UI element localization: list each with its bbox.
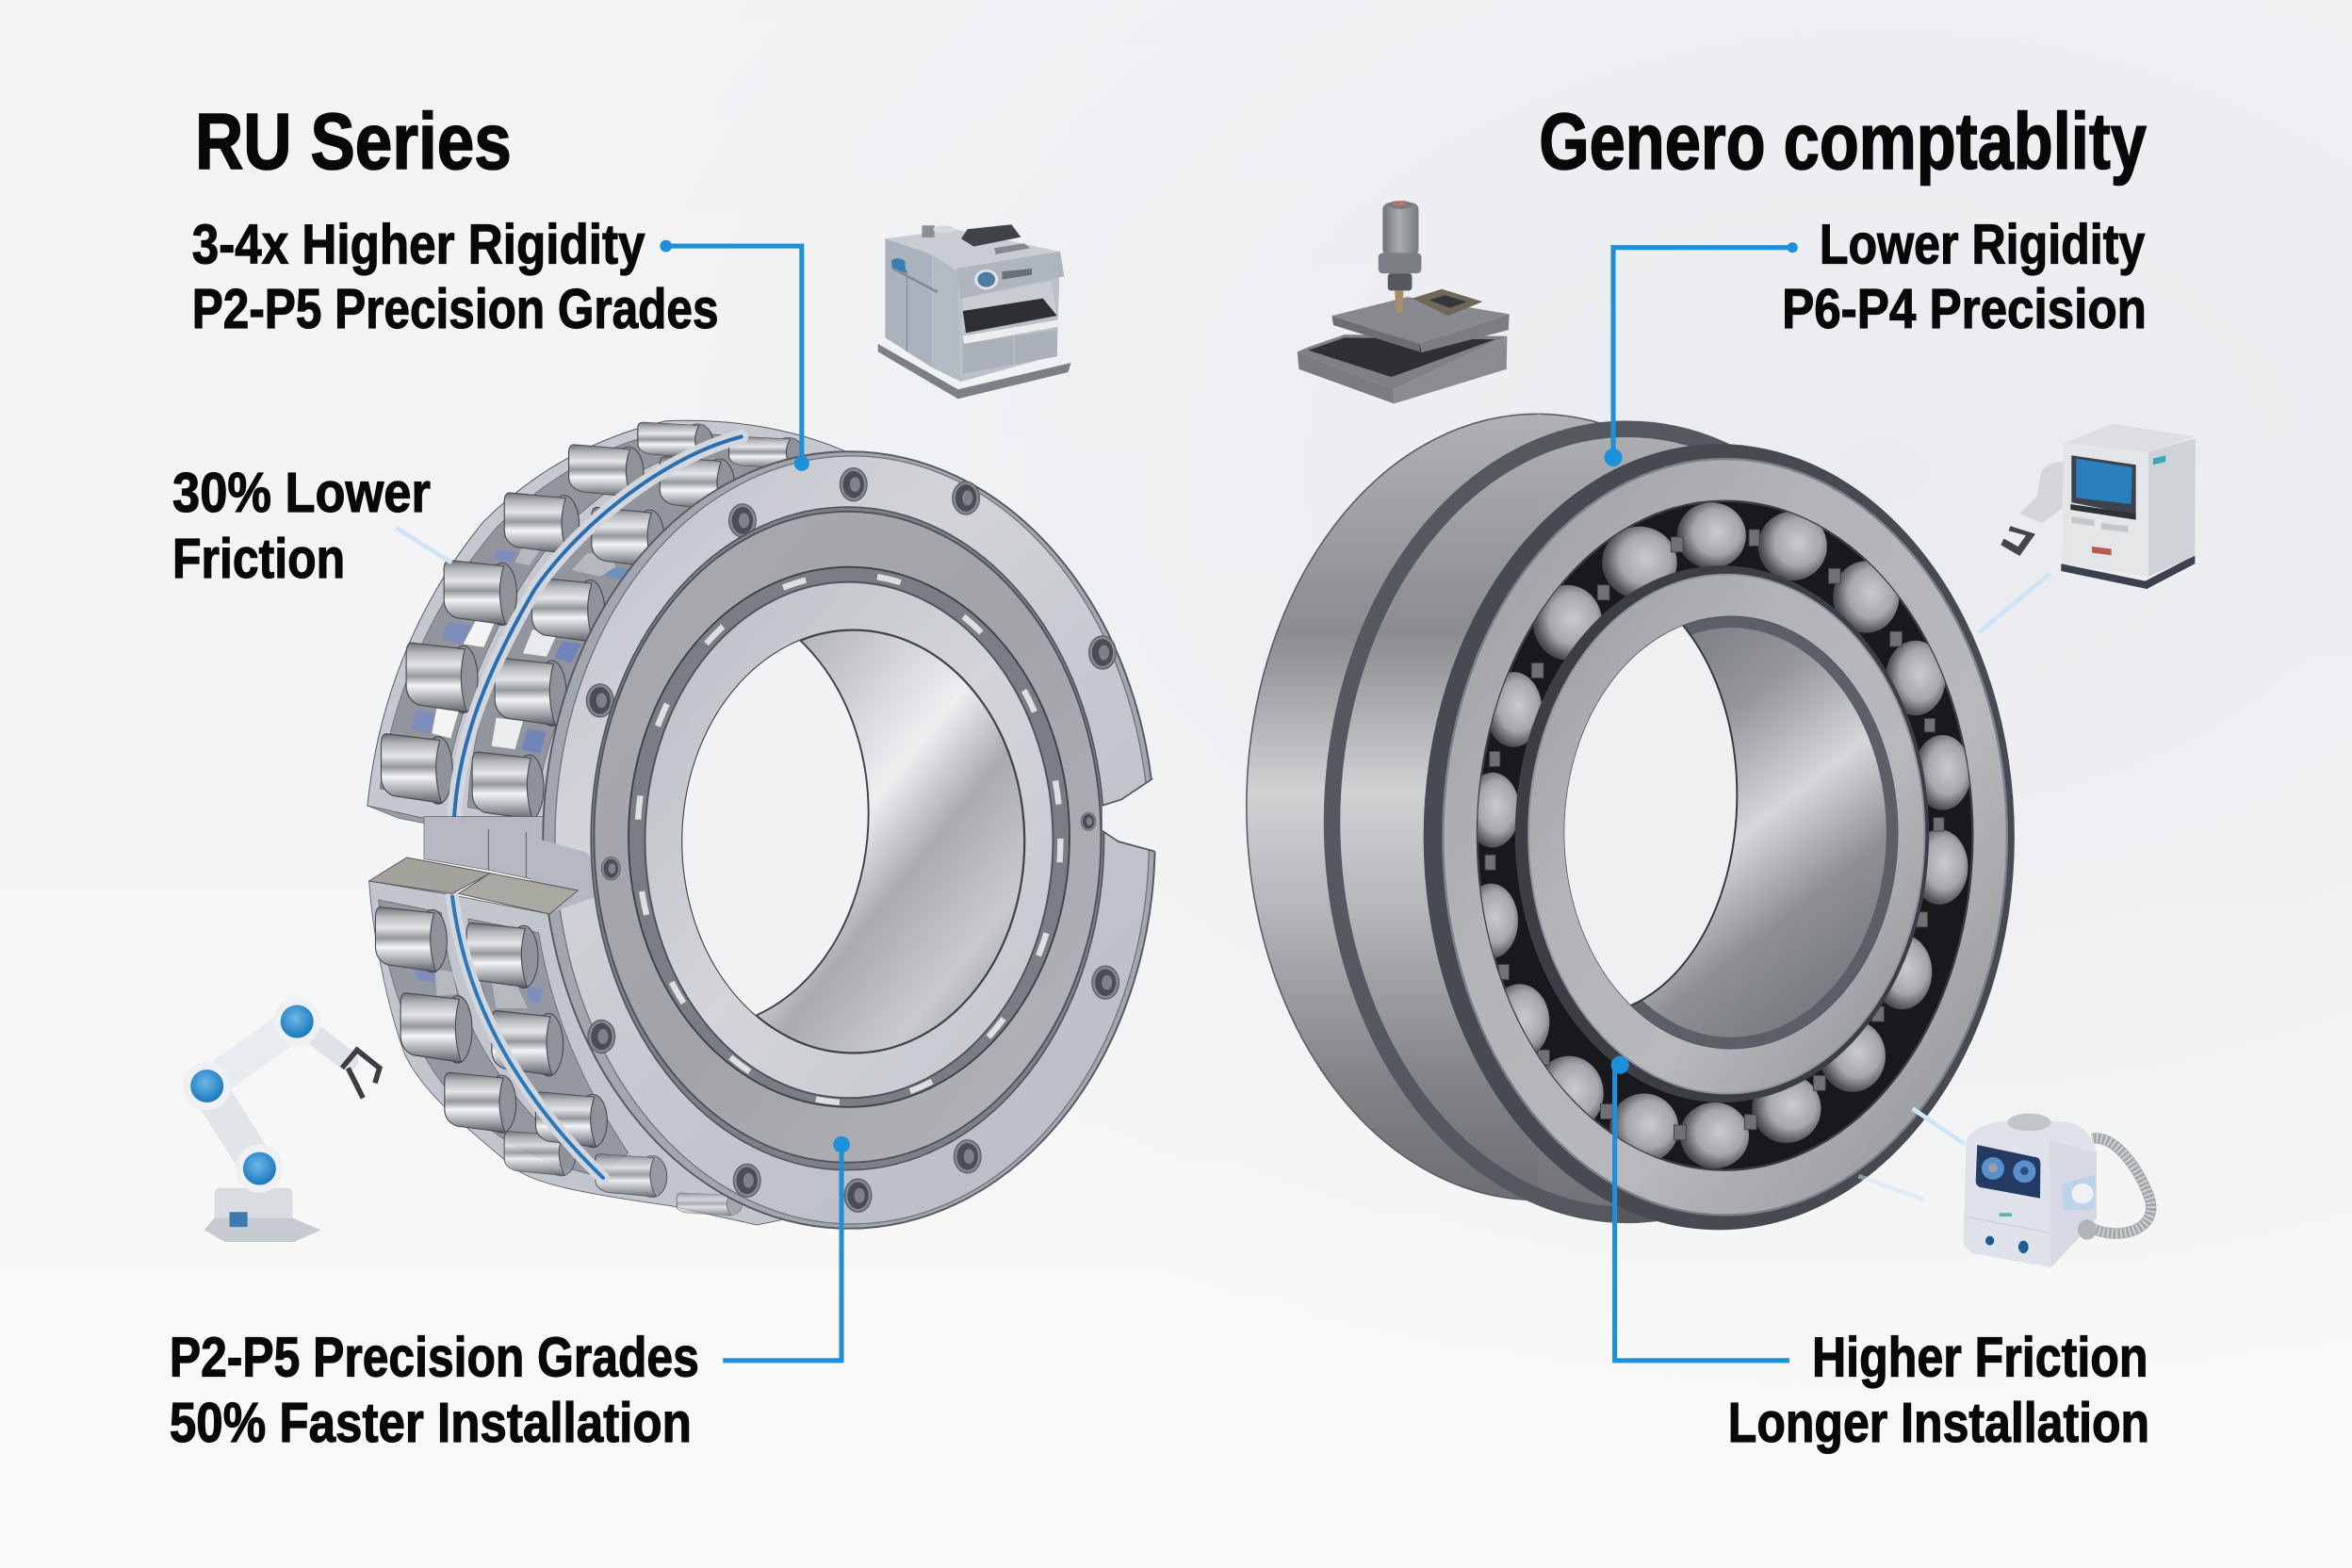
- seam end faces: [369, 858, 578, 914]
- cage windows: [410, 542, 629, 754]
- text block: friction and installation: Longer Installation: [1728, 1391, 2149, 1454]
- text block: rigidity and grades: 3-4x Higher Rigidity: [192, 212, 645, 275]
- text block: lower friction: 30% Lower: [172, 461, 431, 524]
- heading: Genero comptablity: Genero comptablity: [1539, 97, 2147, 186]
- icon: compact machine: [878, 224, 1071, 399]
- leader: higher rigidity: [660, 240, 809, 471]
- text block: lower friction: [172, 461, 431, 590]
- leader: higher friction: [1611, 1056, 1789, 1361]
- outer body cylinder: [1247, 414, 1828, 1230]
- text block: rigidity and grades: [192, 212, 718, 340]
- inner ring: [1515, 565, 1929, 1102]
- icon: cabinet with robot arm: [2001, 424, 2196, 589]
- text block: lower friction: Friction: [172, 527, 345, 590]
- flange seam left: [528, 839, 596, 913]
- faint leaders: [396, 528, 2050, 1200]
- bore: [681, 629, 1025, 1054]
- heading: RU Series: RU Series: [195, 97, 512, 186]
- body groove: [1332, 429, 1923, 1215]
- ball pocket: [1478, 501, 1972, 1170]
- right bearing: generic double row ball bearing: [1247, 414, 2015, 1230]
- text block: lower rigidity and precision: Lower Rigidity: [1820, 212, 2145, 275]
- flange bolt holes: [586, 468, 1119, 1212]
- text block: grades and installation: 50% Faster Installation: [170, 1391, 692, 1454]
- steel balls: [1464, 502, 1971, 1168]
- flange inner gap: [591, 507, 1104, 1170]
- small seam hole right: [1081, 812, 1096, 830]
- callout leader lines: [396, 240, 2050, 1361]
- outer flange: [543, 451, 1155, 1229]
- upper roller cage: [368, 420, 848, 860]
- inner ring: [645, 582, 1053, 1098]
- small seam hole left: [601, 857, 620, 880]
- upper rollers: [381, 422, 804, 820]
- text block: rigidity and grades: P2-P5 Precision Grades: [192, 277, 718, 340]
- text block: friction and installation: [1728, 1326, 2149, 1454]
- text block: lower rigidity and precision: [1782, 212, 2147, 340]
- bore: [1564, 616, 1898, 1050]
- text block: friction and installation: Higher Friction: [1812, 1326, 2148, 1389]
- blue divider strip lower: [452, 897, 603, 1178]
- roller gap: [629, 567, 1070, 1107]
- icon: robot arm: [183, 998, 380, 1242]
- blue divider strip upper: [454, 436, 742, 825]
- cage separators: [1485, 530, 1944, 1140]
- outer ring face: [1443, 459, 2007, 1215]
- lower rollers: [375, 907, 742, 1216]
- split edges: [1102, 778, 1154, 851]
- text block: lower rigidity and precision: P6-P4 Precision: [1782, 277, 2147, 340]
- text block: grades and installation: [170, 1326, 699, 1454]
- dark chamfer ring: [1424, 444, 2015, 1230]
- leader: precision grades: [723, 1136, 850, 1361]
- text block: grades and installation: P2-P5 Precision Grades: [170, 1326, 699, 1389]
- left bearing: RU Series split crossed roller bearing: [368, 420, 1155, 1229]
- icon: milling spindle: [1298, 201, 1510, 403]
- middle ring: [594, 512, 1101, 1163]
- icon: medical device: [1963, 1114, 2151, 1267]
- leader: lower rigidity: [1604, 242, 1798, 466]
- infographic canvas: [170, 109, 2196, 1455]
- lower roller cage: [369, 817, 848, 1225]
